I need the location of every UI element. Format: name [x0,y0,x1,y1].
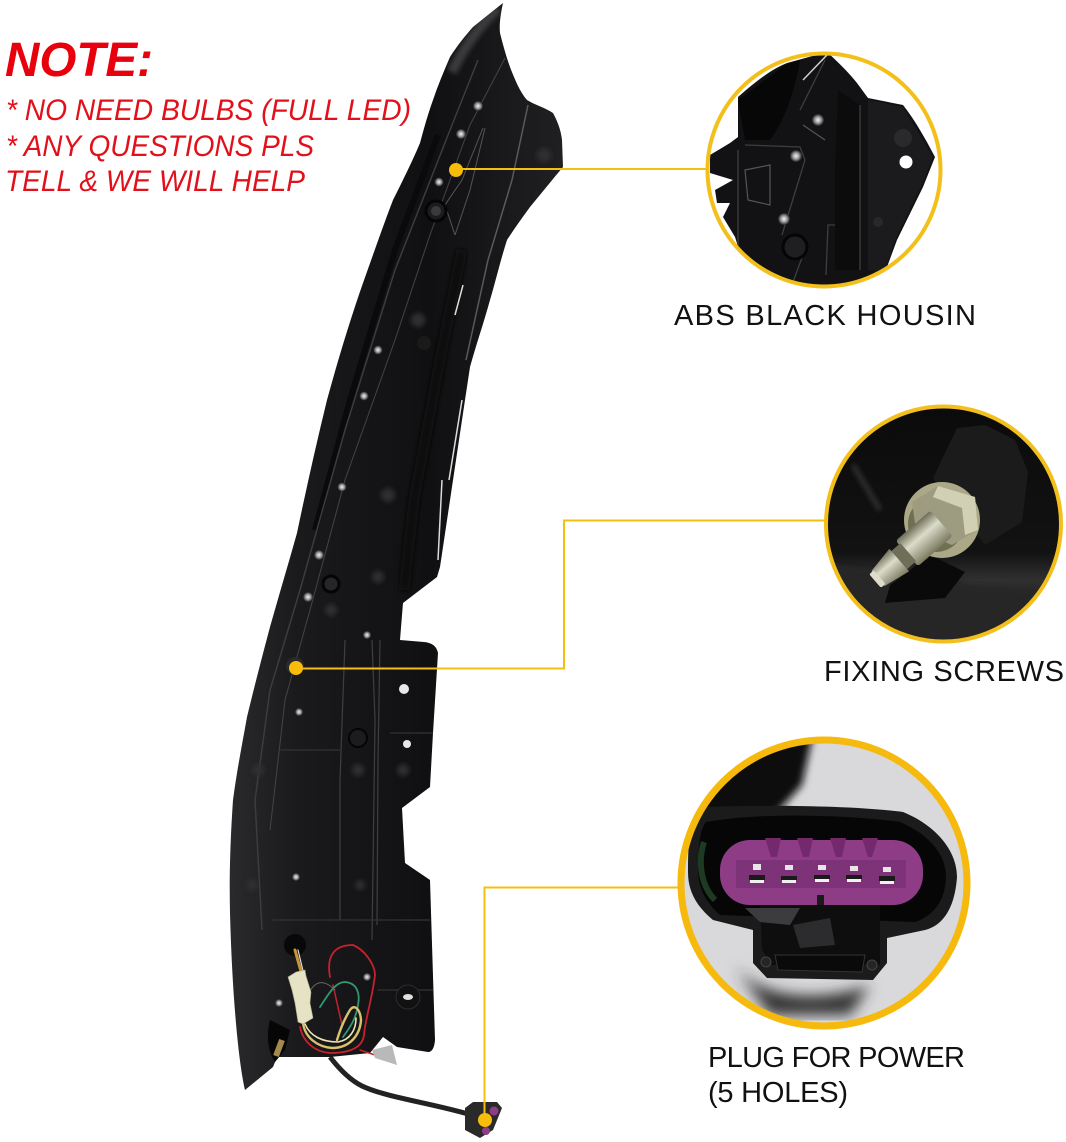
note line 2: * ANY QUESTIONS PLS [6,130,314,163]
washer [904,482,980,558]
note text block [5,34,411,198]
label: plug line 1: PLUG FOR POWER [708,1042,965,1074]
white tag [372,1045,397,1065]
tail light product photo [230,3,563,1138]
green seal [701,842,715,900]
cable blur [707,744,818,807]
leader line: screws [296,520,826,668]
keying tabs [765,838,878,857]
label: plug line 2: (5 HOLES) [708,1077,848,1109]
ring [826,406,1061,642]
callout connectors [296,169,826,1120]
housing close-up [710,52,935,290]
rubber sleeve [933,425,1028,545]
label: fixing screws: FIXING SCREWS [824,656,1064,688]
note heading: NOTE: [5,34,153,87]
detail circle: fixing screws [826,406,1061,650]
mounting screws [275,101,483,1007]
white inline connector [288,970,313,1024]
tail light housing [230,3,563,1090]
latch opening [761,918,880,965]
wires and white connector [295,945,378,1056]
leader line: plug [484,888,678,1120]
grommet spots [246,148,551,891]
ring [708,54,940,286]
detail circle: power plug [670,725,967,1026]
anchor dots [289,163,492,1127]
wiring cable [330,1057,468,1114]
leader line: housing [456,168,707,170]
nut [912,486,978,545]
ground shadow [730,960,870,1015]
detail circle: ABS housing [707,52,941,290]
connector shell [688,806,957,980]
bolts and holes [268,201,446,1062]
small plug [465,1102,502,1138]
housing shading and ridges [255,8,528,990]
note line 3: TELL & WE WILL HELP [5,165,305,198]
label: ABS housing: ABS BLACK HOUSIN [674,300,976,332]
note line 1: * NO NEED BULBS (FULL LED) [6,94,411,127]
lower surface highlights [842,578,960,584]
ring [681,740,967,1026]
purple insert [720,840,923,905]
pin contacts [753,864,891,872]
threaded stud [870,512,952,588]
